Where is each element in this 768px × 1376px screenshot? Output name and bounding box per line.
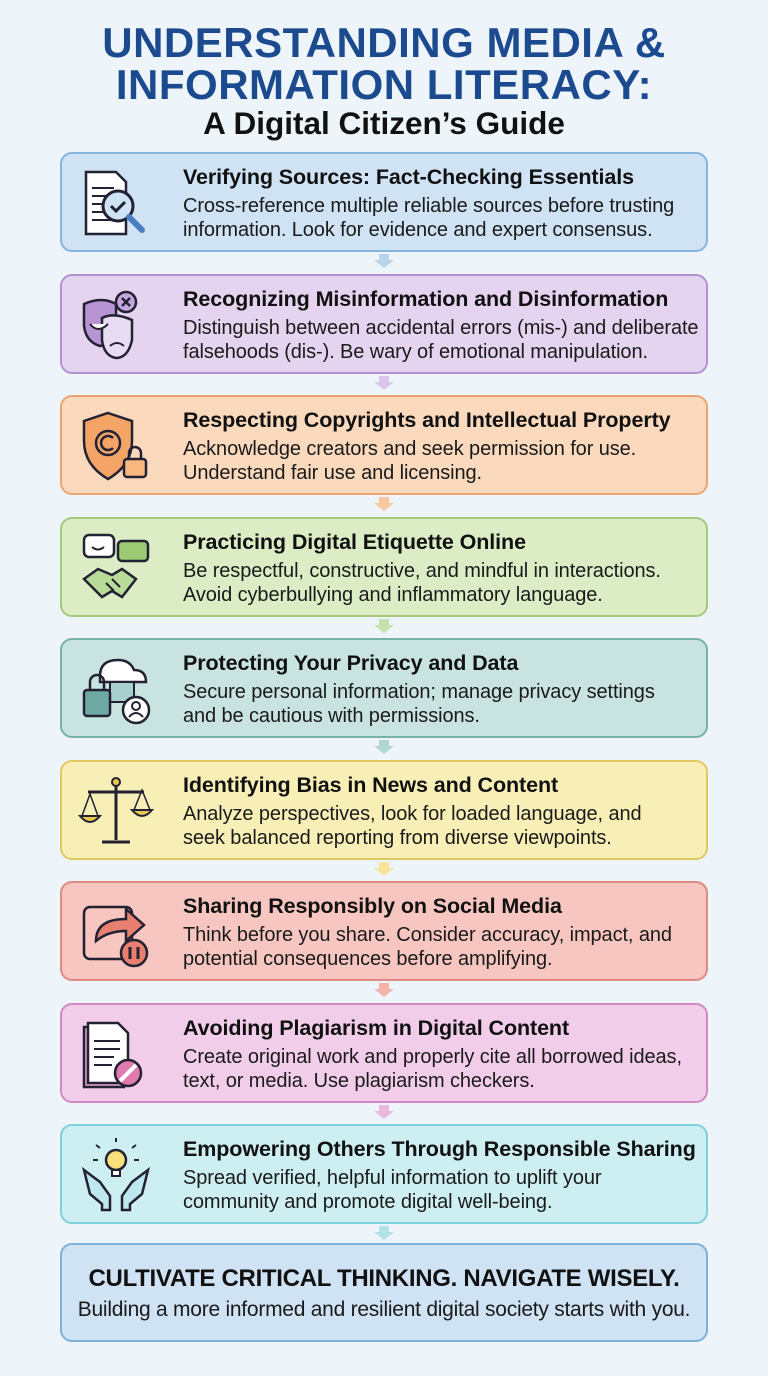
text: potential consequences before amplifying. xyxy=(183,948,552,970)
text xyxy=(183,924,672,970)
icon: masks xyxy=(82,290,138,360)
callout: conclusion: Building a more informed and resilient digital society starts with you. xyxy=(78,1298,690,1321)
arrow xyxy=(374,983,394,997)
icon: hands lightbulb xyxy=(82,1138,150,1212)
heading: Identifying Bias in News and Content xyxy=(183,773,558,797)
text: seek balanced reporting from diverse viewpoints. xyxy=(183,827,612,849)
text: Secure personal information; manage privacy settings xyxy=(183,681,655,703)
arrow xyxy=(374,1226,394,1240)
arrow xyxy=(374,497,394,511)
icon: shield copyright lock xyxy=(82,412,148,480)
panel: verifying sources xyxy=(60,152,708,252)
callout: conclusion xyxy=(60,1243,708,1342)
text: Analyze perspectives, look for loaded language, and xyxy=(183,803,642,825)
panel: sharing xyxy=(60,881,708,981)
icon: scales xyxy=(78,777,154,844)
heading: Protecting Your Privacy and Data xyxy=(183,651,518,675)
arrow xyxy=(374,1105,394,1119)
text xyxy=(183,803,642,849)
text xyxy=(183,1167,602,1213)
heading: Avoiding Plagiarism in Digital Content xyxy=(183,1016,569,1040)
panel: privacy xyxy=(60,638,708,738)
text xyxy=(183,195,674,241)
arrow xyxy=(374,254,394,268)
icon: share pause xyxy=(82,906,148,968)
text: Avoid cyberbullying and inflammatory language. xyxy=(183,584,603,606)
panel: etiquette xyxy=(60,517,708,617)
text xyxy=(183,681,655,727)
panel: copyrights xyxy=(60,395,708,495)
text: information. Look for evidence and expert consensus. xyxy=(183,219,653,241)
arrow xyxy=(374,619,394,633)
arrow xyxy=(374,740,394,754)
title: INFORMATION LITERACY: xyxy=(116,61,652,108)
title: UNDERSTANDING MEDIA & xyxy=(102,19,666,66)
text xyxy=(183,438,636,484)
panel: empowering xyxy=(60,1124,708,1224)
text: falsehoods (dis-). Be wary of emotional manipulation. xyxy=(183,341,648,363)
title xyxy=(102,19,666,108)
text: Think before you share. Consider accuracy, impact, and xyxy=(183,924,672,946)
icon: document prohibited xyxy=(82,1022,142,1088)
text: text, or media. Use plagiarism checkers. xyxy=(183,1070,535,1092)
heading: Recognizing Misinformation and Disinformation xyxy=(183,287,668,311)
text: Understand fair use and licensing. xyxy=(183,462,482,484)
heading: Verifying Sources: Fact-Checking Essentials xyxy=(183,165,634,189)
arrow xyxy=(374,862,394,876)
arrow xyxy=(374,376,394,390)
icon: document magnifier xyxy=(84,170,145,236)
text: Create original work and properly cite all borrowed ideas, xyxy=(183,1046,682,1068)
panel: plagiarism xyxy=(60,1003,708,1103)
text: Be respectful, constructive, and mindful in interactions. xyxy=(183,560,661,582)
heading: Empowering Others Through Responsible Sharing xyxy=(183,1137,696,1161)
text: Acknowledge creators and seek permission for use. xyxy=(183,438,636,460)
panel: bias xyxy=(60,760,708,860)
icon: chat handshake xyxy=(82,534,150,599)
subtitle: A Digital Citizen’s Guide xyxy=(203,105,565,141)
heading: Respecting Copyrights and Intellectual Property xyxy=(183,408,671,432)
text xyxy=(183,560,661,606)
text: Spread verified, helpful information to uplift your xyxy=(183,1167,601,1189)
panel: misinformation xyxy=(60,274,708,374)
text xyxy=(183,317,698,363)
text: community and promote digital well-being. xyxy=(183,1191,552,1213)
icon: lock cloud user xyxy=(82,658,150,724)
callout: conclusion: CULTIVATE CRITICAL THINKING. NAVIGATE WISELY. xyxy=(89,1265,679,1292)
text xyxy=(183,1046,682,1092)
text: and be cautious with permissions. xyxy=(183,705,480,727)
heading: Practicing Digital Etiquette Online xyxy=(183,530,526,554)
text: Cross-reference multiple reliable sources before trusting xyxy=(183,195,674,217)
heading: Sharing Responsibly on Social Media xyxy=(183,894,562,918)
text: Distinguish between accidental errors (mis-) and deliberate xyxy=(183,317,698,339)
